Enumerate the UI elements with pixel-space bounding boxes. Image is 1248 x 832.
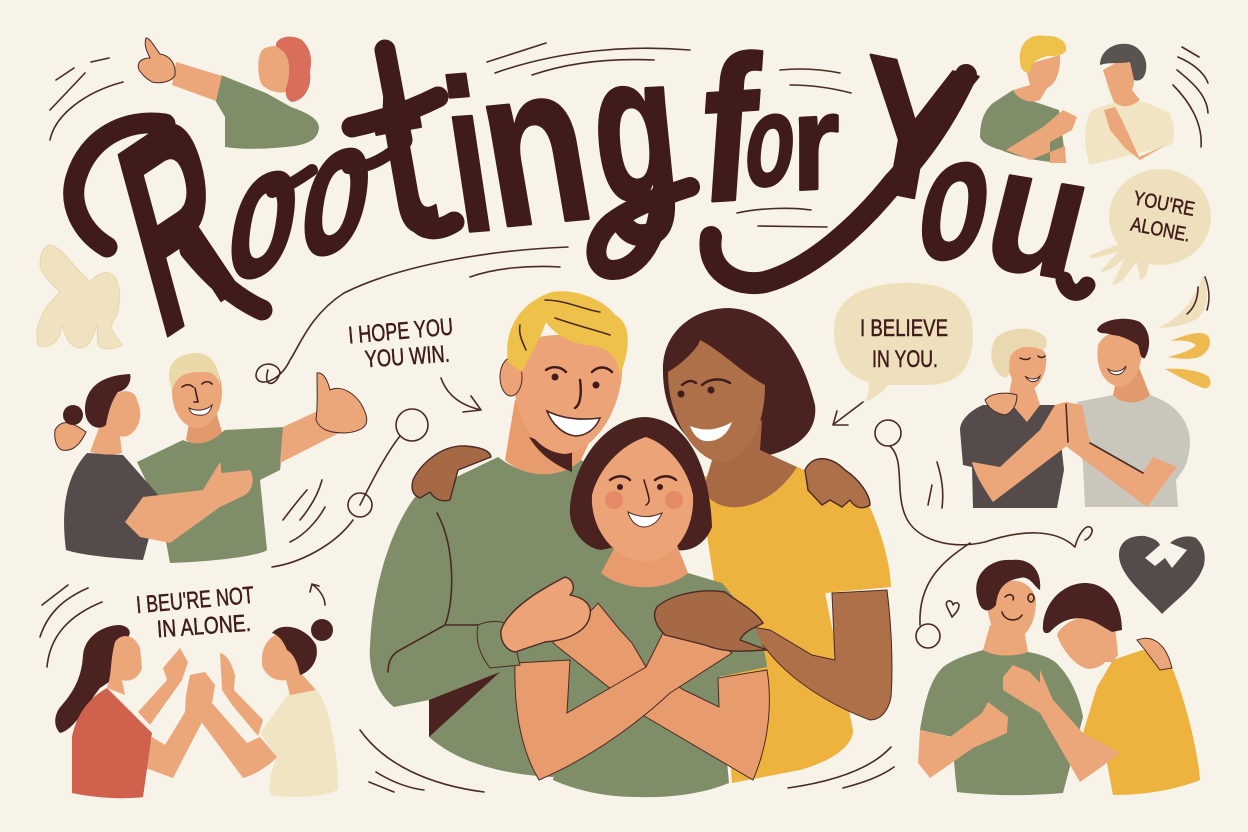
curve with loop bbox=[256, 247, 568, 383]
man: shadow under arm bbox=[429, 672, 500, 737]
arms bbox=[972, 402, 1070, 502]
speech text: not alone: I BEU'RE NOT bbox=[135, 582, 255, 619]
right woman: face bbox=[262, 633, 316, 695]
speech text: I hope you win: I HOPE YOU bbox=[347, 313, 454, 349]
man: head bbox=[512, 335, 622, 454]
title: R bbox=[96, 50, 257, 397]
right man: head bbox=[1057, 615, 1118, 669]
man: arm and thumb bbox=[280, 402, 345, 463]
man: hand on child bbox=[501, 577, 590, 652]
right man: gray tee bbox=[1077, 395, 1190, 507]
woman: hair bbox=[663, 308, 815, 457]
speech bubble: I believe in you: IN YOU. bbox=[872, 346, 938, 373]
right woman: arms bbox=[200, 703, 277, 778]
right man: hand on shoulder bbox=[1137, 638, 1172, 670]
yellow accent marks bbox=[1158, 275, 1210, 388]
left man: green tee bbox=[920, 650, 1083, 795]
right man: neck and head bbox=[1113, 365, 1150, 402]
figure: top-right pair bbox=[980, 36, 1174, 165]
woman: yellow shirt bbox=[698, 467, 891, 783]
speech bubble: you're alone: YOU'RE bbox=[1131, 187, 1197, 221]
left man: dark tee bbox=[960, 405, 1064, 508]
child: hair back bbox=[570, 417, 712, 550]
child: neck bbox=[601, 545, 688, 587]
man: green tee bbox=[137, 427, 285, 563]
speech bubble: you're alone bbox=[1089, 169, 1211, 285]
figure group: central family bbox=[370, 291, 892, 797]
left man: arm bbox=[918, 702, 1008, 778]
left woman: face bbox=[107, 636, 142, 695]
speech text: not alone: IN ALONE. bbox=[156, 610, 252, 643]
figure: right pair clasped hands bbox=[960, 319, 1190, 508]
title: o bbox=[908, 94, 1005, 301]
title bbox=[74, 8, 1110, 397]
right man: yellow tee bbox=[1083, 650, 1200, 795]
left woman: hair bbox=[55, 625, 130, 733]
woman: face bbox=[668, 340, 765, 462]
woman: arm bbox=[740, 590, 892, 720]
figure: top-left thumbs up bbox=[138, 37, 319, 149]
woman: hand on shoulder bbox=[805, 459, 870, 508]
right man: arm bbox=[1003, 665, 1120, 782]
child: face bbox=[592, 437, 693, 562]
speech bubble: I believe in you bbox=[833, 283, 973, 425]
icon: pale hands silhouette bbox=[37, 245, 122, 349]
title: f bbox=[694, 15, 765, 246]
man: neck bbox=[505, 400, 595, 474]
speech bubble: you're alone: ALONE. bbox=[1129, 214, 1192, 247]
left woman: arms bbox=[138, 648, 188, 725]
woman: head and hand bbox=[55, 423, 86, 450]
title: o bbox=[289, 73, 388, 302]
man: green sweater bbox=[370, 457, 640, 777]
figure: left pair with thumbs up bbox=[55, 353, 367, 563]
woman: neck bbox=[703, 420, 797, 507]
man: sleeve lines bbox=[388, 513, 500, 672]
title: u bbox=[969, 111, 1110, 317]
man: hand on shoulder bbox=[412, 446, 491, 501]
child: crossing arm bbox=[515, 630, 732, 780]
man: sleeve cuff bbox=[477, 621, 520, 668]
decorative curly line right bbox=[875, 420, 1092, 648]
icon: broken heart bbox=[1119, 536, 1205, 614]
left man: hand on shoulder bbox=[985, 393, 1017, 415]
title: o bbox=[739, 67, 803, 216]
arrow bbox=[441, 378, 481, 412]
child: arm over bbox=[553, 603, 769, 780]
figure: bottom-right pair bbox=[918, 560, 1200, 795]
title: g bbox=[581, 8, 688, 247]
left man: neck and head bbox=[983, 625, 1028, 656]
arrow bbox=[833, 402, 863, 425]
title: n bbox=[461, 14, 607, 275]
lollipop doodle bbox=[348, 409, 428, 517]
title: Y bbox=[838, 14, 988, 247]
left man: neck and head bbox=[1008, 378, 1040, 422]
figure: bottom-left high five bbox=[55, 619, 338, 798]
woman: arm and hand bbox=[125, 462, 253, 543]
title: i bbox=[431, 34, 506, 278]
woman: hand on child bbox=[655, 591, 767, 651]
child: green tee bbox=[512, 573, 767, 797]
title: o bbox=[216, 96, 315, 325]
speech text: I hope you win: YOU WIN. bbox=[364, 341, 451, 373]
speech text: not alone bbox=[135, 582, 325, 643]
man: face bbox=[546, 367, 612, 408]
speech text: I hope you win bbox=[256, 247, 568, 412]
right woman: cream tee bbox=[260, 690, 338, 797]
title: r bbox=[792, 67, 839, 219]
title: t bbox=[355, 18, 450, 284]
woman: gray tee bbox=[64, 453, 160, 560]
man: head bbox=[186, 408, 222, 443]
speech bubble: I believe in you: I BELIEVE bbox=[860, 315, 948, 342]
left woman: red tee bbox=[72, 688, 152, 798]
man: blond hair bbox=[507, 291, 628, 375]
